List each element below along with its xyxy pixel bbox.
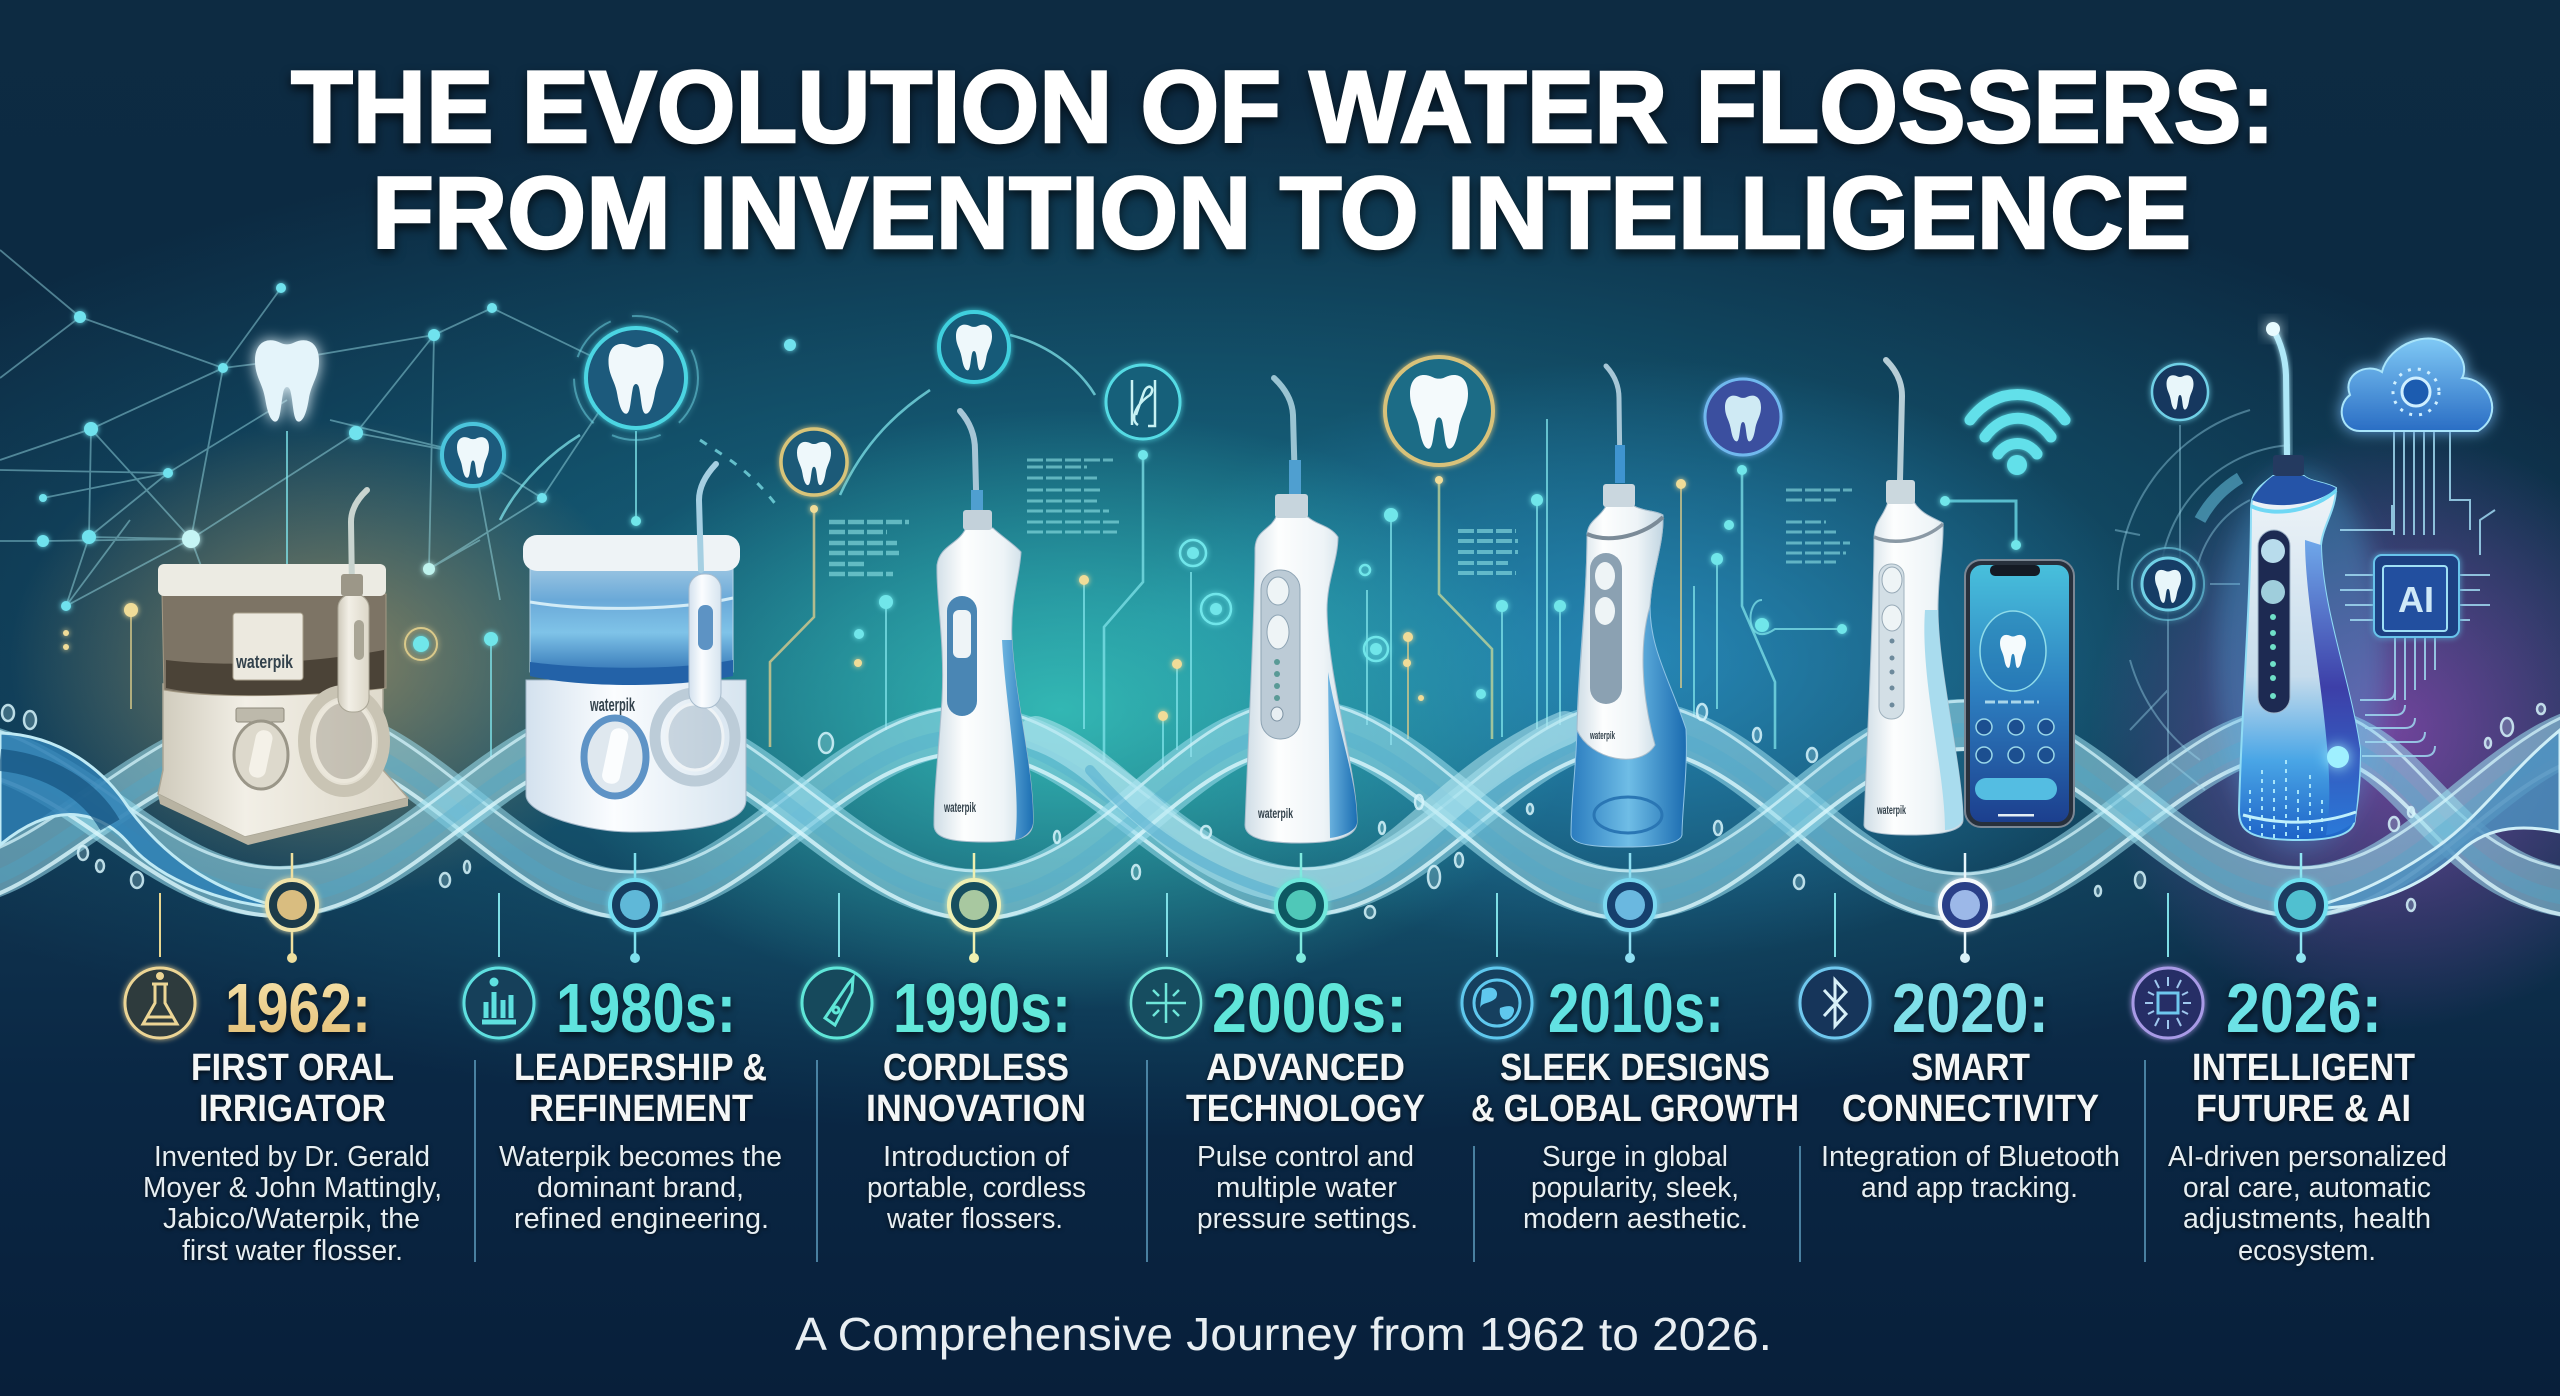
heading 2020 [1842,1047,2099,1130]
heading 2010s: & GLOBAL GROWTH [1471,1088,1799,1130]
heading 2020: CONNECTIVITY [1842,1088,2099,1130]
description 2020: Integration of Bluetooth [1821,1141,2120,1173]
description 1980s: Waterpik becomes the [499,1141,782,1173]
data readout text blocks [829,460,1852,574]
icon: globe [1462,968,1532,1038]
icon: small tooth in ring [442,424,504,486]
heading 1962: FIRST ORAL [191,1047,394,1089]
column 2000s [1131,968,1425,1235]
heading 1990s: CORDLESS [883,1047,1069,1089]
connector lines and circuit traces [131,335,2016,770]
icon: pulse spark [1131,968,1201,1038]
node 2000s [1276,853,1326,963]
heading 2026: FUTURE & AI [2196,1088,2411,1130]
water strand back [0,702,2560,920]
description 2010s: popularity, sleek, [1531,1172,1739,1204]
description 2020 [1821,1141,2120,1204]
column 2010s [1462,968,1799,1235]
description 2010s: modern aesthetic. [1523,1203,1748,1235]
icon: glowing tooth without ring [255,340,319,422]
heading 2026 [2192,1047,2415,1130]
column connector and divider lines [160,893,2168,1262]
description 1990s: portable, cordless [867,1172,1086,1204]
device: 2000s flosser [1245,378,1357,843]
heading 2010s: SLEEK DESIGNS [1500,1047,1770,1089]
column 2020 [1800,968,2120,1204]
description 1962: first water flosser. [182,1235,403,1267]
description 2026: ecosystem. [2238,1235,2376,1267]
device: smartphone app [1965,560,2074,827]
heading 1990s: INNOVATION [866,1088,1086,1130]
device: 1962 countertop irrigator: waterpik [235,652,294,672]
network graph: left constellation [0,250,796,611]
heading 1980s [514,1047,767,1130]
description 1980s: dominant brand, [537,1172,744,1204]
device: 1980s countertop flosser [523,464,746,832]
description 1990s: water flossers. [886,1203,1063,1235]
icon: blue tooth ring [1705,379,1781,455]
node 2010s [1605,853,1655,963]
heading 1962: IRRIGATOR [199,1088,386,1130]
year 2020: 2020: [1892,969,2049,1047]
description 2000s: multiple water [1216,1172,1397,1204]
description 2026: adjustments, health [2183,1203,2431,1235]
water ribbons [0,701,2560,920]
icon: large gold tooth ring [1385,357,1493,465]
device: 2000s flosser: waterpik [1257,805,1293,821]
water wedge right [2310,730,2560,908]
year 1980s: 1980s: [556,969,736,1047]
column 1980s [464,968,782,1235]
description 1962: Moyer & John Mattingly, [143,1172,442,1204]
year 1990s: 1990s: [893,969,1071,1047]
heading 2000s: ADVANCED [1206,1047,1405,1089]
description 2010s: Surge in global [1542,1141,1728,1173]
icon: flask [125,968,195,1038]
node 2020 [1940,853,1990,963]
footer tagline: A Comprehensive Journey from 1962 to 2026. [795,1308,1772,1360]
year 2026: 2026: [2226,969,2382,1047]
description 2010s [1523,1141,1748,1235]
node 2026 [2276,853,2326,963]
description 1980s: refined engineering. [514,1203,769,1235]
icon: cordless flosser [802,968,872,1038]
water strand front [0,701,2560,919]
description 1962: Invented by Dr. Gerald [154,1141,430,1173]
icon: bar chart [464,968,534,1038]
title: THE EVOLUTION OF WATER FLOSSERS: [291,50,2275,164]
year 1962: 1962: [225,969,371,1047]
device: 1962 countertop irrigator [158,490,408,845]
device: 1990s cordless flosser: waterpik [943,799,976,815]
AI radial circuit rings [2115,410,2290,790]
column 1962 [125,968,442,1267]
icon: tooth ring top [939,312,1009,382]
description 2000s: Pulse control and [1197,1141,1414,1173]
description 1990s [867,1141,1086,1235]
icon: flosser sketch in ring [1106,365,1180,439]
description 1962 [143,1141,442,1267]
heading 1980s: LEADERSHIP & [514,1047,767,1089]
heading 2020: SMART [1911,1047,2030,1089]
column 1990s [802,968,1086,1235]
icon: AI chip [2374,555,2459,637]
water droplets [2,704,2545,918]
heading 2010s [1471,1047,1799,1130]
device: 2010s sleek flosser [1571,366,1686,847]
description 1980s [499,1141,782,1235]
icon: AI cloud [2342,339,2492,431]
heading 1990s [866,1047,1086,1130]
year 2010s: 2010s: [1548,969,1724,1047]
description 2026 [2168,1141,2447,1267]
heading 2000s: TECHNOLOGY [1186,1088,1425,1130]
device: 2020 connected flosser: waterpik [1876,803,1906,817]
timeline nodes and stems [267,853,2326,963]
heading 1962 [191,1047,394,1130]
water thick blue highlight [1090,770,1304,900]
description 1990s: Introduction of [883,1141,1070,1173]
signal dots and rings [63,450,2021,721]
icon: wifi signal [1970,394,2065,475]
device: 1990s cordless flosser [934,411,1033,842]
water thick centre surge [1036,728,1565,888]
icon: gold tooth ring [781,429,847,495]
heading 2026: INTELLIGENT [2192,1047,2415,1089]
node 1990s [949,853,999,963]
device: 2010s sleek flosser: waterpik [1589,730,1615,742]
description 2026: oral care, automatic [2183,1172,2431,1204]
node 1962 [267,853,317,963]
description 2020: and app tracking. [1861,1172,2078,1204]
icon: bluetooth [1800,968,1870,1038]
icon: AI tooth ring top [2152,364,2208,420]
node 1980s [610,853,660,963]
description 1962: Jabico/Waterpik, the [163,1203,420,1235]
description 2000s [1197,1141,1418,1235]
device: 2026 AI flosser [2215,322,2385,850]
device: 1980s countertop flosser: waterpik [589,695,636,715]
title: FROM INVENTION TO INTELLIGENCE [372,156,2191,270]
device: 2020 connected flosser [1864,360,1963,835]
icon: AI microchip [2133,968,2203,1038]
description 2000s: pressure settings. [1197,1203,1418,1235]
heading 1980s: REFINEMENT [529,1088,753,1130]
heading 2000s [1186,1047,1425,1130]
title [291,50,2275,270]
description 2026: AI-driven personalized [2168,1141,2447,1173]
icon: tooth in large ring [574,316,698,440]
year 2000s: 2000s: [1212,969,1407,1047]
column 2026 [2133,968,2447,1267]
circuit traces to AI chip [2340,431,2495,756]
water wedge left [0,733,285,908]
icon: AI tooth ring middle [2132,548,2204,620]
icon: AI chip: AI [2398,579,2434,620]
